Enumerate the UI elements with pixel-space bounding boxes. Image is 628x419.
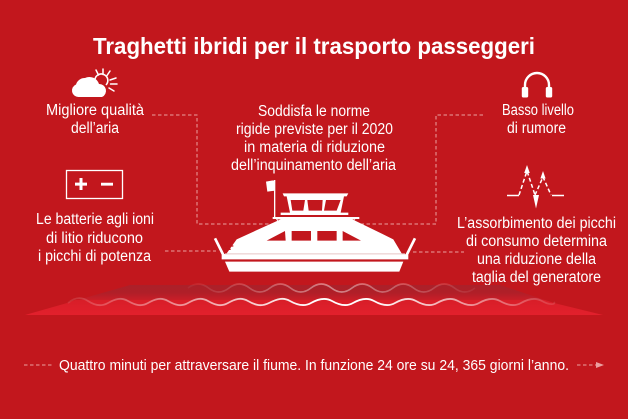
text: air quality: dell’aria: [71, 120, 119, 137]
icon: battery: [66, 170, 122, 198]
connector: peak absorption to ferry: [413, 251, 464, 253]
text: noise: di rumore: [507, 120, 566, 137]
text: regulations: Soddisfa le norme: [258, 103, 370, 120]
text: air quality: Migliore qualità: [46, 102, 144, 119]
ferry: [215, 180, 415, 272]
footer text: Quattro minuti per attraversare il fiume. In funzione 24 ore su 24, 365 giorni l’anno.: [59, 357, 569, 374]
upper railing: [273, 217, 359, 225]
title: Traghetti ibridi per il trasporto passeggeri: [93, 33, 535, 59]
icon: cloud and sun: [72, 69, 117, 97]
text: peak absorption: taglia del generatore: [472, 269, 601, 286]
back wave: [188, 284, 475, 292]
flag: [266, 180, 275, 217]
text: noise: [502, 102, 574, 137]
text: peak absorption: di consumo determina: [466, 233, 607, 250]
footer arrow: [577, 362, 604, 368]
cabin and hull: [222, 217, 408, 259]
icon: headphones: [522, 73, 552, 98]
text: batteries: Le batterie agli ioni: [36, 211, 154, 228]
text: peak absorption: L’assorbimento dei picchi: [457, 215, 616, 232]
text: batteries: [36, 211, 154, 265]
connector: batteries to ferry: [165, 250, 216, 252]
text: regulations: [231, 103, 396, 174]
lower hull: [225, 262, 403, 272]
front wave: [68, 298, 554, 305]
wheelhouse: [281, 193, 348, 215]
text: regulations: rigide previste per il 2020: [236, 121, 393, 138]
connector: air quality to ferry: [152, 115, 277, 224]
text: peak absorption: una riduzione della: [477, 251, 596, 268]
footer dashes left: [24, 364, 52, 366]
icon: peak pulse: [507, 165, 564, 208]
connector: noise to ferry: [360, 115, 483, 224]
text: air quality: [46, 102, 144, 137]
water surface: [25, 284, 603, 315]
text: noise: Basso livello: [502, 102, 574, 119]
text: peak absorption: [457, 215, 616, 286]
text: regulations: dell’inquinamento dell’aria: [231, 157, 396, 174]
text: regulations: in materia di riduzione: [244, 139, 385, 156]
text: batteries: i picchi di potenza: [38, 248, 151, 265]
text: batteries: di litio riducono: [46, 230, 143, 247]
